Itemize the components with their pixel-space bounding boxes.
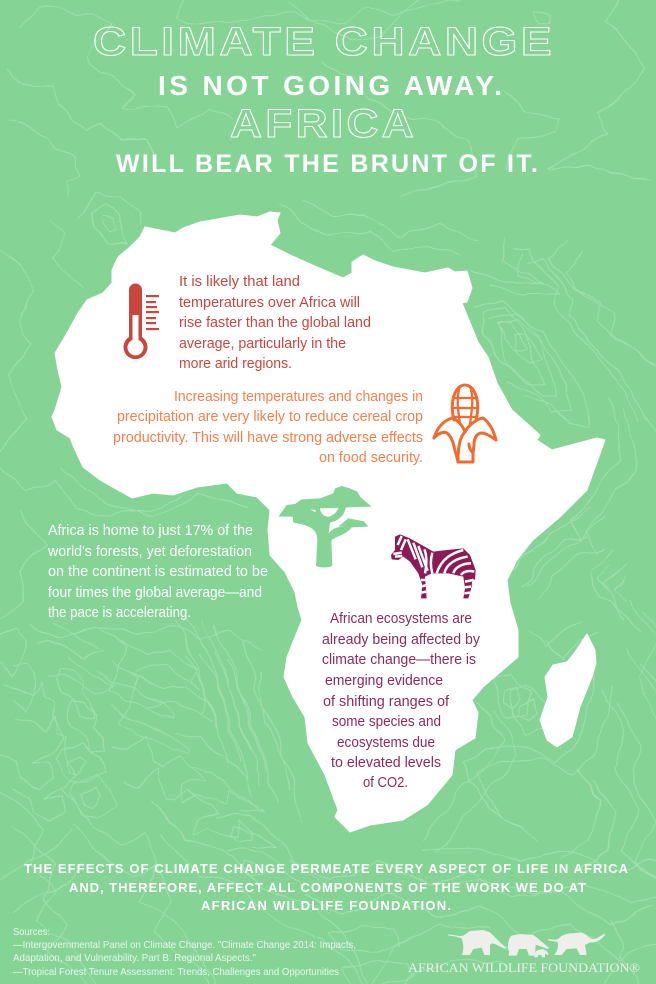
text: deforestation: world's forests, yet deforestation — [47, 543, 252, 560]
title line: africa: AFRICA — [230, 102, 417, 146]
icon: acacia tree — [278, 486, 372, 567]
conclusion heading — [24, 861, 629, 913]
sources: —Tropical Forest Tenure Assessment: Trends, Challenges and Opportunities — [13, 966, 339, 978]
icon: zebra — [391, 534, 476, 598]
text: ecosystems: some species and — [332, 713, 441, 730]
text: ecosystems: emerging evidence — [325, 672, 443, 689]
title line: is not going away: IS NOT GOING AWAY. — [158, 70, 502, 101]
text: cereal crops — [113, 388, 423, 466]
sources — [13, 926, 356, 978]
text: cereal crops: Increasing temperatures and changes in — [174, 388, 423, 405]
text: ecosystems: of shifting ranges of — [323, 693, 450, 710]
conclusion heading: THE EFFECTS OF CLIMATE CHANGE PERMEATE EVERY ASPECT OF LIFE IN AFRICA — [24, 861, 629, 876]
title — [93, 20, 555, 178]
text: cereal crops: precipitation are very likely to reduce cereal crop — [117, 408, 423, 425]
text: ecosystems: already being affected by — [322, 631, 480, 648]
text: land temperatures: rise faster than the global land — [179, 314, 371, 331]
text: cereal crops: on food security. — [319, 449, 423, 466]
text: land temperatures: It is likely that land — [179, 273, 300, 290]
text: land temperatures: average, particularly in the — [179, 335, 346, 352]
text: ecosystems: ecosystems due — [337, 734, 435, 751]
logo: African Wildlife Foundation — [408, 930, 640, 975]
branch gap — [310, 508, 338, 517]
text: ecosystems: of CO2. — [363, 774, 408, 791]
text: deforestation — [47, 522, 268, 621]
icon: thermometer — [124, 284, 159, 359]
map: Africa and Madagascar — [52, 212, 605, 832]
text: ecosystems: to elevated levels — [331, 754, 441, 771]
text: land temperatures — [179, 273, 371, 372]
title line: will bear the brunt: WILL BEAR THE BRUNT OF IT. — [116, 150, 538, 178]
text: land temperatures: more arid regions. — [179, 355, 292, 372]
text: deforestation: the pace is accelerating. — [48, 604, 191, 621]
title line: climate change: CLIMATE CHANGE — [93, 20, 555, 64]
icon: elephant herd — [448, 930, 605, 957]
sources: Adaptation, and Vulnerability. Part B: Regional Aspects." — [13, 952, 256, 964]
text: deforestation: on the continent is estimated to be — [48, 563, 268, 580]
text: cereal crops: productivity. This will have strong adverse effects — [113, 429, 423, 446]
text: land temperatures: temperatures over Africa will — [179, 294, 360, 311]
text: ecosystems — [322, 610, 480, 791]
text: deforestation: four times the global average—and — [48, 584, 262, 601]
icon: corn — [434, 385, 496, 462]
text: deforestation: Africa is home to just 17% of the — [48, 522, 253, 539]
tree silhouette — [278, 486, 372, 567]
sources: —Intergovernmental Panel on Climate Change. "Climate Change 2014: Impacts, — [13, 939, 356, 951]
text: ecosystems: African ecosystems are — [330, 610, 472, 627]
sources: Sources: — [13, 926, 50, 938]
text: ecosystems: climate change—there is — [322, 651, 476, 668]
conclusion heading: AND, THEREFORE, AFFECT ALL COMPONENTS OF THE WORK WE DO AT — [69, 880, 586, 895]
conclusion heading: AFRICAN WILDLIFE FOUNDATION. — [201, 898, 451, 913]
logo wordmark: AFRICAN WILDLIFE FOUNDATION® — [408, 960, 640, 975]
